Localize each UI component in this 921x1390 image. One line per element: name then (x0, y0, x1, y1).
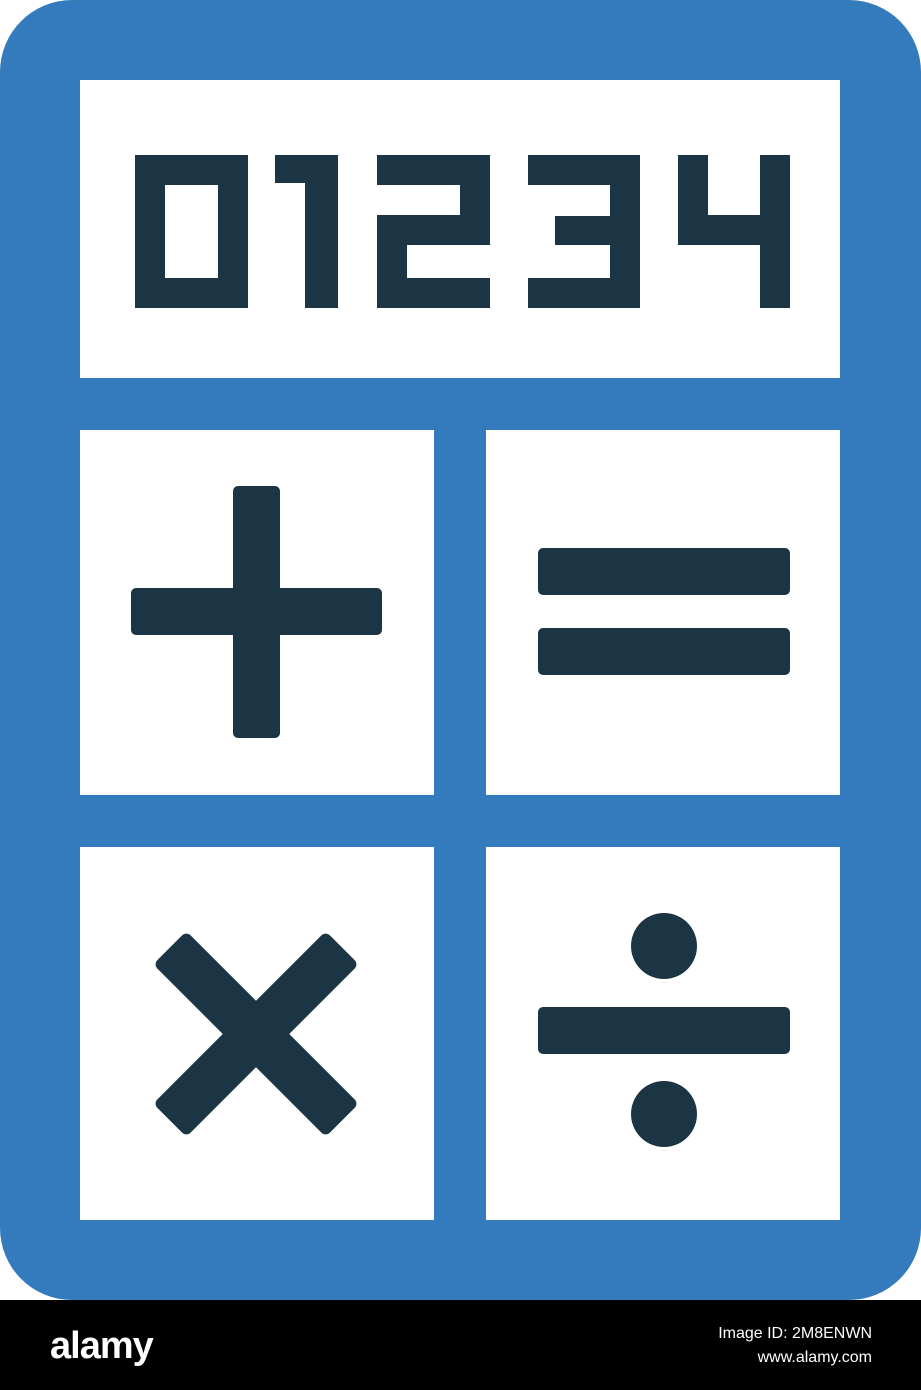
key: divide (486, 847, 840, 1220)
digit 0 (135, 155, 248, 308)
digit 1 (275, 155, 338, 308)
display panel (80, 80, 840, 378)
footer image id: Image ID: 2M8ENWN (718, 1325, 872, 1342)
digit 4 (678, 155, 790, 308)
key: equals (486, 430, 840, 795)
footer bar (0, 1300, 921, 1390)
digit 3 (528, 155, 640, 308)
digit 2 (377, 155, 490, 308)
key: plus (80, 430, 434, 795)
footer logo text: alamy (50, 1325, 154, 1367)
key: multiply (80, 847, 434, 1220)
footer url: www.alamy.com (757, 1349, 872, 1366)
